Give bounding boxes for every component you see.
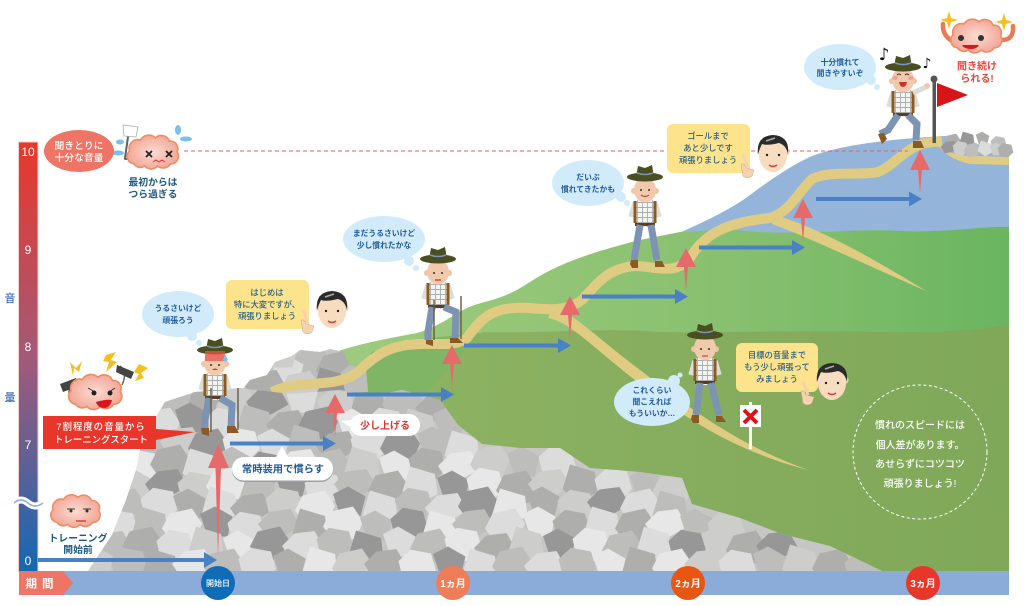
icon: music notes: ♪ — [923, 56, 931, 72]
brain: overwhelmed with white flag — [112, 125, 192, 169]
bubble: quite used to it — [552, 160, 630, 206]
bubble: noisy but try — [142, 291, 214, 346]
brain: before training — [51, 495, 100, 527]
arrow: red 1 — [325, 394, 345, 437]
axis marker: 2ヵ月: 2ヵ月 — [675, 578, 701, 590]
advice: first stage: 特に大変ですが、 — [234, 300, 300, 310]
callout: constant wear: 常時装用で慣らす — [242, 462, 324, 476]
bubble: noisy but try: 頑張ろう — [162, 316, 194, 325]
axis label: 音量 — [4, 291, 16, 404]
rocks: summit — [941, 132, 1013, 157]
arrow: red 2 — [442, 345, 462, 388]
arrow: red 5 — [793, 199, 813, 242]
bubble: fully used: 十分慣れて — [821, 57, 859, 67]
route: branch to middle — [772, 215, 926, 291]
route: main beige path — [272, 141, 942, 392]
advice: first stage: 頑張りましょう — [238, 311, 296, 321]
terrain: light green hill — [300, 227, 1009, 450]
advice: try a little more: もう少し頑張って — [744, 362, 810, 372]
route: final strip — [936, 139, 1009, 165]
advice: first stage — [226, 280, 348, 334]
axis marker: 3ヵ月 — [906, 566, 940, 600]
advice: near goal — [667, 124, 790, 178]
arrow: blue start — [38, 552, 217, 568]
axis marker: 開始日 — [201, 566, 235, 600]
axis marker: 3ヵ月: 3ヵ月 — [910, 578, 936, 590]
hiker: second month — [627, 165, 665, 268]
text: can keep listening: られる! — [960, 73, 994, 85]
callout: constant wear — [232, 446, 333, 482]
bubble: this is good enough — [614, 372, 690, 426]
advice: near goal: ゴールまで — [687, 131, 729, 141]
bubble: getting used a little: 少し慣れたかな — [357, 240, 411, 250]
terrain: blue hill — [672, 136, 1009, 240]
arrow: red 4 — [676, 248, 696, 291]
hiker: giving up — [687, 323, 726, 423]
axis: period bar — [19, 571, 1009, 595]
text: before training: 開始前 — [63, 543, 93, 556]
arrow: blue 4 — [582, 289, 688, 304]
callout: raise a little — [341, 414, 420, 436]
axis label: 音量: 量 — [4, 391, 16, 404]
arrow: red 6 — [910, 150, 930, 193]
text: too hard from the start — [129, 176, 178, 200]
note: dashed circle message: 頑張りましょう! — [884, 478, 956, 490]
axis marker: 1ヵ月 — [436, 566, 470, 600]
bubble: this is good enough: もういいか… — [629, 409, 675, 418]
callout: sufficient volume — [44, 130, 114, 172]
callout: raise a little: 少し上げる — [360, 419, 410, 432]
icon: music notes — [879, 45, 931, 72]
route: branch giving up — [548, 308, 808, 470]
advice: try a little more: みましょう — [756, 374, 798, 384]
callout: start at 70 percent: 7割程度の音量から — [56, 421, 146, 433]
icon: music notes: ♪ — [879, 45, 889, 65]
text: too hard from the start: つら過ぎる — [129, 188, 177, 200]
advice: first stage: はじめは — [250, 288, 284, 298]
scale: volume bar: 9 — [25, 243, 32, 257]
note: dashed circle message: 個人差があります。 — [876, 438, 964, 452]
arrow: blue 3 — [464, 338, 571, 353]
bubble: this is good enough: これくらい — [633, 386, 672, 395]
bubble: quite used to it: 慣れてきたかも — [561, 184, 615, 194]
scale: volume bar: 0 — [25, 554, 32, 568]
axis marker: 2ヵ月 — [671, 566, 705, 600]
sign: dead end — [740, 402, 761, 449]
arrow: blue 6 — [816, 192, 922, 206]
text: can keep listening — [957, 60, 997, 85]
flag: goal — [930, 76, 968, 143]
hiker: first month — [420, 247, 463, 346]
rocks: back pile — [244, 349, 368, 394]
advice: near goal: あと少しです — [683, 143, 733, 153]
axis marker: 1ヵ月: 1ヵ月 — [440, 578, 466, 590]
note: dashed circle message: あせらずにコツコツ — [875, 458, 965, 470]
arrow: red start — [208, 444, 229, 557]
arrow: blue 1 — [230, 436, 336, 451]
axis marker: 開始日: 開始日 — [206, 578, 230, 588]
terrain: mid green slope — [340, 332, 490, 470]
advice: try a little more — [736, 343, 848, 405]
arrow: blue 2 — [347, 387, 454, 402]
text: can keep listening: 聞き続け — [957, 60, 997, 72]
bubble: getting used a little: まだうるさいけど — [353, 228, 415, 238]
callout: start at 70 percent: トレーニングスタート — [54, 434, 148, 445]
callout: sufficient volume: 十分な音量 — [55, 151, 104, 164]
advice: try a little more: 目標の音量まで — [748, 350, 806, 360]
arrow: blue 5 — [699, 240, 805, 255]
scale: volume bar — [14, 142, 43, 572]
hiker: at start — [197, 338, 239, 436]
callout: sufficient volume: 聞きとりに — [55, 140, 103, 152]
text: before training — [49, 532, 108, 556]
bubble: fully used — [804, 44, 880, 90]
scale: volume bar: 7 — [25, 438, 32, 452]
bubble: getting used a little — [343, 216, 425, 271]
bubble: quite used to it: だいぶ — [576, 173, 600, 182]
callout: start at 70 percent — [43, 416, 195, 449]
scale: volume bar: 8 — [25, 340, 32, 354]
text: before training: トレーニング — [49, 532, 108, 544]
advice: near goal: 頑張りましょう — [679, 155, 737, 165]
brain: angry with dumbbells — [60, 352, 148, 409]
arrow: red 3 — [560, 296, 580, 340]
rocks: main pile — [88, 388, 882, 571]
bubble: noisy but try: うるさいけど — [155, 303, 202, 313]
axis label: 音量: 音 — [4, 291, 16, 305]
bubble: this is good enough: 聞こえれば — [633, 396, 672, 406]
note: dashed circle message: 慣れのスピードには — [875, 418, 965, 432]
bubble: fully used: 聞きやすいぞ — [817, 68, 864, 78]
hiker: goal — [878, 55, 930, 148]
scale: volume bar: 10 — [21, 145, 35, 159]
target line: dotted red — [184, 150, 908, 152]
axis: period bar: 期間 — [26, 576, 58, 590]
text: too hard from the start: 最初からは — [129, 176, 178, 188]
brain: happy at goal — [940, 11, 1013, 53]
note: dashed circle message — [853, 385, 987, 519]
terrain: dark green field — [420, 324, 1009, 571]
